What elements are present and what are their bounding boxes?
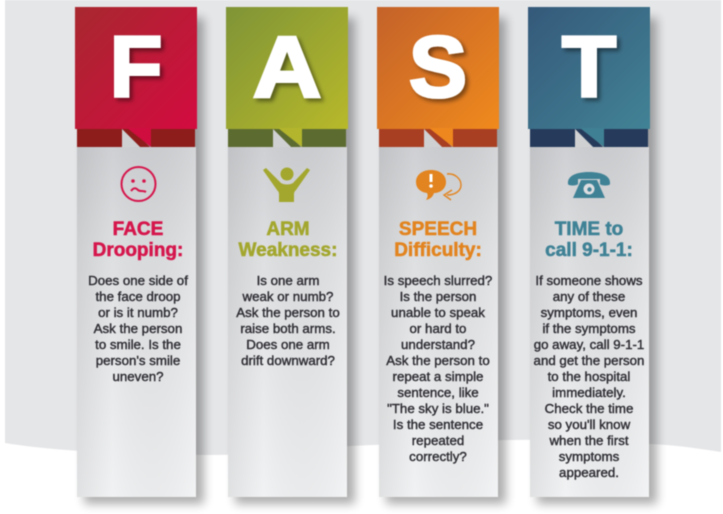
text block: symptoms, even	[541, 305, 637, 320]
text block: when the first	[548, 433, 629, 448]
text block: sentence, like	[397, 385, 479, 400]
text block: unable to speak	[391, 305, 485, 320]
strip shadow	[84, 18, 204, 504]
dark band	[228, 129, 346, 147]
heading: Weakness:	[239, 240, 337, 261]
icon: sad face	[122, 167, 156, 201]
strip shadow	[235, 18, 355, 504]
panel: F face	[75, 7, 204, 504]
heading: call 9-1-1:	[545, 240, 633, 261]
panel: S speech	[377, 7, 506, 504]
strip shadow	[386, 18, 506, 504]
heading	[394, 219, 482, 261]
text block: understand?	[401, 337, 475, 352]
letter tile	[377, 7, 499, 129]
heading: FACE	[113, 219, 163, 240]
text block: any of these	[553, 289, 625, 304]
icon: telephone	[568, 172, 610, 198]
text block: drift downward?	[241, 353, 335, 368]
dark band	[77, 129, 195, 147]
text block: Does one arm	[246, 337, 330, 352]
text block: immediately.	[552, 385, 626, 400]
panel: T time	[528, 7, 657, 504]
text block: Is the person	[400, 289, 476, 304]
text block: Is the sentence	[393, 417, 483, 432]
letter tile	[75, 7, 197, 129]
letter: A	[253, 19, 321, 116]
heading: Drooping:	[93, 240, 183, 261]
panel: A arm	[226, 7, 355, 504]
text block: Ask the person to	[386, 353, 490, 368]
text block: to the hospital	[548, 369, 630, 384]
letter tile	[226, 7, 348, 129]
text block: to smile. Is the	[95, 337, 181, 352]
letter: F	[110, 20, 162, 116]
text block: or is it numb?	[98, 305, 178, 320]
strip body	[228, 147, 347, 497]
heading: Difficulty:	[394, 240, 482, 261]
heading	[93, 219, 183, 261]
text block: Is speech slurred?	[384, 273, 492, 288]
text block: Ask the person to	[236, 305, 340, 320]
dark band	[530, 129, 648, 147]
heading: TIME to	[555, 219, 623, 240]
heading: ARM	[266, 219, 310, 240]
text block: uneven?	[112, 369, 164, 384]
text block: appeared.	[559, 465, 619, 480]
heading	[239, 219, 337, 261]
text block: go away, call 9-1-1	[534, 337, 644, 352]
letter: S	[409, 20, 467, 115]
letter: T	[562, 20, 616, 115]
text block	[236, 273, 340, 368]
text block: "The sky is blue."	[387, 401, 489, 416]
text block: and get the person	[534, 353, 644, 368]
text block: or hard to	[410, 321, 466, 336]
dark band	[379, 129, 497, 147]
strip body	[77, 147, 196, 497]
heading	[545, 219, 633, 261]
text block: so you'll know	[548, 417, 631, 432]
text block: person's smile	[96, 353, 180, 368]
text block	[534, 273, 644, 480]
text block	[384, 273, 492, 464]
icon: person raising arms	[263, 168, 310, 202]
text block	[88, 273, 188, 384]
text block: Check the time	[545, 401, 633, 416]
strip shadow	[537, 18, 657, 504]
text block: Ask the person	[94, 321, 182, 336]
text block: repeated	[412, 433, 464, 448]
text block: Is one arm	[257, 273, 319, 288]
text block: weak or numb?	[242, 289, 333, 304]
text block: If someone shows	[535, 273, 643, 288]
text block: symptoms	[559, 449, 620, 464]
text block: raise both arms.	[240, 321, 336, 336]
text block: repeat a simple	[393, 369, 483, 384]
heading: SPEECH	[399, 219, 477, 240]
strip body	[379, 147, 498, 497]
text block: the face droop	[95, 289, 181, 304]
text block: if the symptoms	[542, 321, 636, 336]
letter tile	[528, 7, 650, 129]
text block: Does one side of	[88, 273, 188, 288]
icon: speech bubbles	[416, 170, 461, 200]
text block: correctly?	[409, 449, 467, 464]
strip body	[530, 147, 649, 497]
